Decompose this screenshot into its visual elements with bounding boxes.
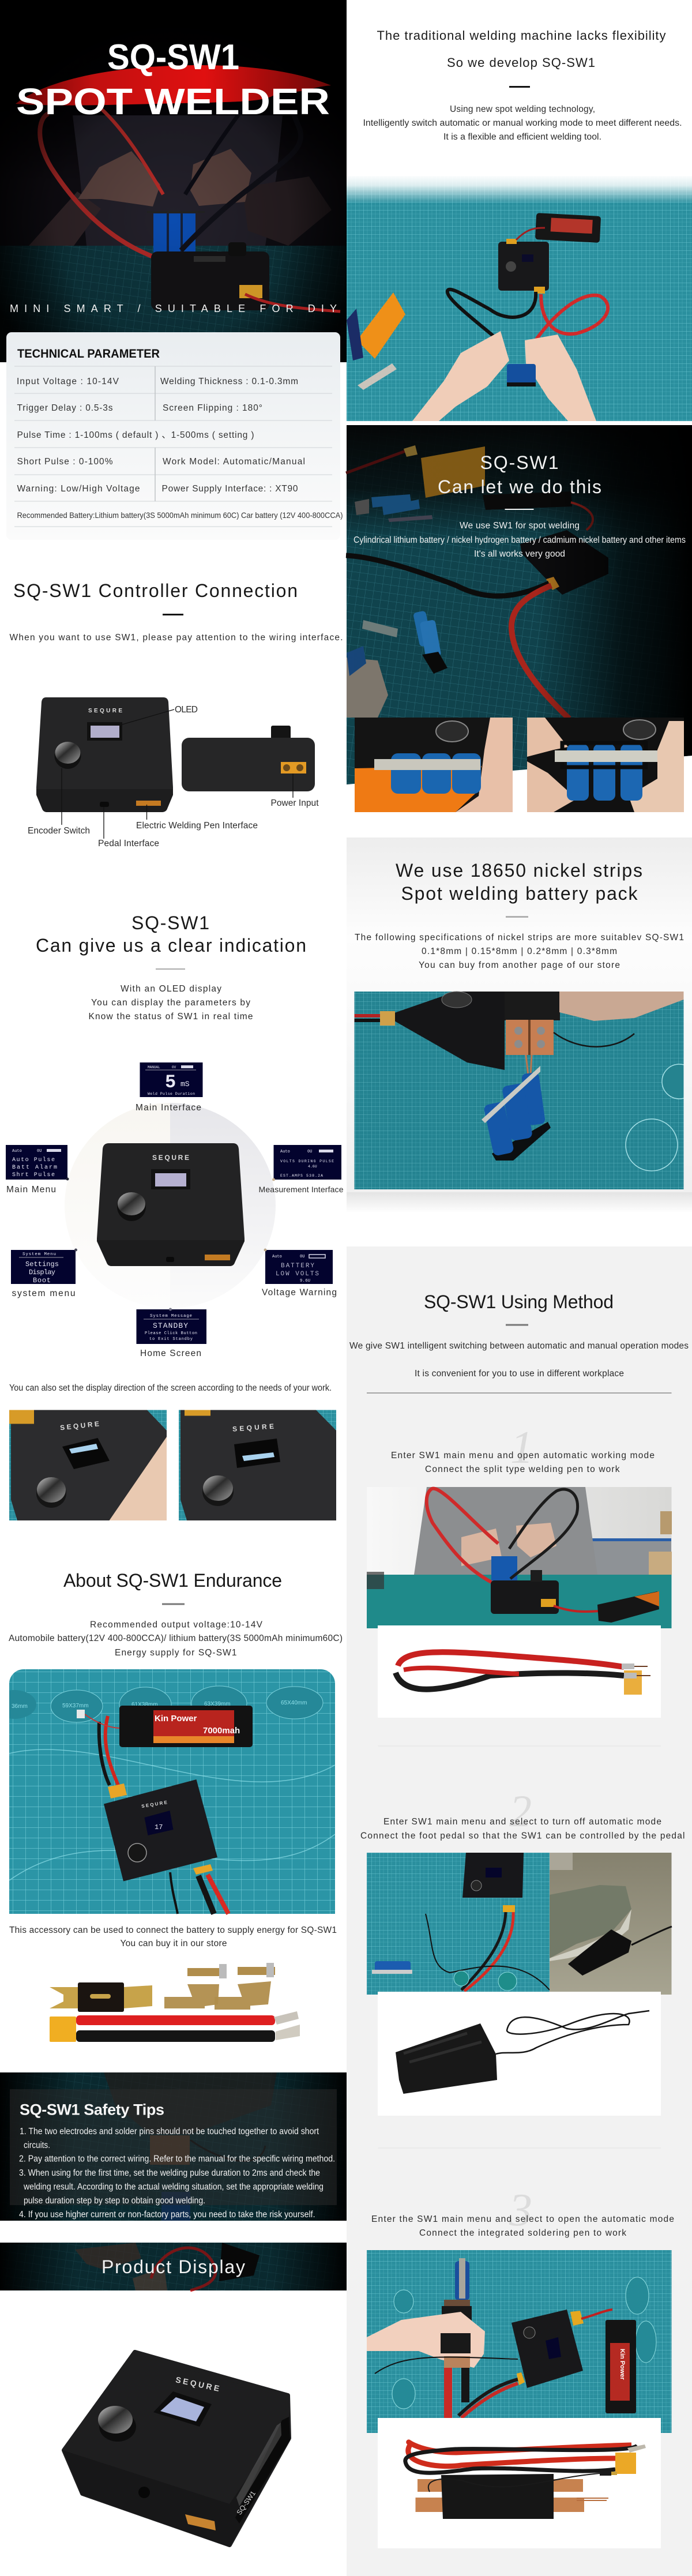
screen: measurement interface: Auto — [280, 1150, 290, 1154]
screen: home screen: to Exit Standby — [149, 1337, 193, 1342]
device silhouette — [151, 242, 340, 311]
photo: cells in black holder — [527, 718, 684, 812]
photo: battery and device: SEQURE — [141, 1800, 168, 1809]
section text: Recommended output voltage:10-14V — [90, 1620, 263, 1630]
section text: Energy supply for SQ-SW1 — [115, 1648, 236, 1658]
intro text: Using new spot welding technology, — [450, 104, 595, 114]
step text: Enter SW1 main menu and select to turn off automatic mode — [383, 1817, 661, 1827]
panel: flexibility intro — [347, 28, 692, 421]
callout labels: Electric Welding Pen Interface — [136, 821, 258, 831]
safety list: pulse duration step by step to obtain good welding. — [24, 2196, 205, 2206]
step text — [391, 1451, 655, 1474]
section text: This accessory can be used to connect the battery to supply energy for SQ-SW1 — [9, 1925, 337, 1935]
screen: main menu — [6, 1145, 69, 1180]
photo: battery and device: 59X37mm — [62, 1703, 89, 1709]
section heading: SQ-SW1 Controller Connection — [13, 580, 298, 601]
panel: hero — [0, 0, 347, 362]
section text — [9, 1620, 343, 1658]
panel: can let we do this — [346, 425, 692, 812]
callout labels: Power Input — [271, 798, 319, 808]
device: front view: SEQURE — [88, 708, 122, 714]
screen: voltage warning — [264, 1248, 333, 1284]
panel: nickel strips — [347, 838, 692, 1213]
screen: main interface: mS — [180, 1080, 190, 1088]
intro text — [363, 104, 682, 142]
section text — [9, 1925, 337, 1948]
parameter rows: Power Supply Interface: : XT90 — [161, 484, 298, 494]
photo: welding on cutting mat — [347, 175, 692, 421]
photo: battery and device: 63X39mm — [204, 1701, 231, 1707]
photo: shoe on pedal — [550, 1853, 672, 1995]
section text: You can display the parameters by — [91, 998, 250, 1008]
screen: measurement interface: 0U — [307, 1150, 312, 1154]
parameter rows — [17, 377, 343, 520]
screen: voltage warning: LOW VOLTS — [276, 1271, 319, 1278]
screen: voltage warning: 9.6U — [300, 1279, 310, 1283]
brush stroke — [16, 65, 331, 106]
section heading: SQ-SW1 Using Method — [424, 1291, 614, 1312]
parameter heading: TECHNICAL PARAMETER — [17, 347, 160, 361]
screen: main interface: 5 — [165, 1072, 176, 1093]
intro heading: The traditional welding machine lacks flexibility — [377, 28, 665, 43]
screen: main menu: Auto — [12, 1149, 22, 1154]
screen: measurement interface — [272, 1145, 341, 1181]
screen: voltage warning: Auto — [272, 1255, 282, 1259]
step text: Enter SW1 main menu and open automatic working mode — [391, 1451, 655, 1460]
section heading — [36, 913, 306, 956]
callout labels: Encoder Switch — [28, 826, 90, 836]
heading band: Product Display — [101, 2256, 245, 2277]
step 3 — [367, 2185, 674, 2548]
screen: system menu: Settings — [25, 1260, 59, 1268]
photo: pedal wiring on mat — [367, 1853, 550, 1995]
nickel text — [355, 933, 684, 970]
backdrop circle — [65, 1103, 276, 1308]
screen: main menu: Shrt Pulse — [12, 1171, 55, 1178]
parameter rows: Warning: Low/High Voltage — [17, 484, 140, 494]
photo: integrated pen on mat: Kin Power — [619, 2349, 626, 2380]
photo: spot welding pack — [354, 992, 692, 1189]
section text: You can buy it in our store — [120, 1939, 227, 1948]
parameter rows: Pulse Time : 1-100ms ( default ) 、1-500ms ( setting ) — [17, 430, 254, 440]
section heading: About SQ-SW1 Endurance — [63, 1570, 282, 1591]
screen: system menu: Boot — [33, 1276, 51, 1285]
intro heading: So we develop SQ-SW1 — [447, 55, 595, 70]
device: front view — [36, 697, 173, 812]
photo: battery and device: 36mm — [12, 1703, 28, 1710]
screen: main menu: Batt Alarm — [12, 1164, 57, 1171]
section text: With an OLED display — [121, 984, 221, 994]
dim background objects — [346, 445, 608, 719]
step text: Enter the SW1 main menu and select to open the automatic mode — [371, 2214, 674, 2224]
safety heading: SQ-SW1 Safety Tips — [20, 2101, 164, 2118]
photo: screen direction one: SEQURE — [59, 1420, 100, 1432]
nickel heading: Spot welding battery pack — [401, 883, 638, 904]
safety list: 2. Pay attention to the correct wiring. Refer to the manual for the specific wiring method. — [19, 2154, 335, 2164]
parameter rows: Input Voltage : 10-14V — [17, 377, 119, 386]
photo: workbench — [367, 1487, 672, 1628]
photo: battery accessories — [50, 1963, 300, 2042]
screen: system menu: System Menu — [22, 1252, 56, 1257]
screen: home screen: Please Click Button — [145, 1331, 197, 1336]
label: system menu — [12, 1289, 75, 1298]
section text — [89, 984, 253, 1022]
panel: endurance — [0, 1570, 343, 2042]
device: product shot — [63, 2352, 290, 2547]
screen: voltage warning: 0U — [300, 1255, 304, 1259]
section heading — [438, 452, 601, 497]
screen: system menu — [11, 1248, 77, 1285]
photo: battery and device: 17 — [155, 1823, 163, 1831]
device: product shot: SQ-SW1 — [235, 2489, 257, 2517]
device: centre: SEQURE — [152, 1154, 189, 1162]
step text — [360, 1817, 685, 1841]
step text: Connect the foot pedal so that the SW1 can be controlled by the pedal — [360, 1831, 685, 1841]
screen: main interface: 0V — [172, 1065, 176, 1069]
panel: controller connection — [9, 580, 343, 848]
device: side view — [182, 726, 315, 791]
title: SPOT WELDER — [16, 81, 330, 122]
photo: welding pen kit — [378, 2418, 661, 2548]
panel: using method — [347, 1246, 692, 2576]
photo: split welding pens — [378, 1625, 661, 1718]
photo: battery and device: Kin Power — [155, 1714, 197, 1723]
label: Main Interface — [136, 1103, 201, 1113]
screen: main interface: MANUAL — [148, 1065, 160, 1069]
section text: It is convenient for you to use in different workplace — [415, 1369, 624, 1379]
label: Main Menu — [6, 1185, 56, 1195]
screen: main interface — [140, 1062, 203, 1097]
title: SQ-SW1 — [107, 37, 239, 77]
step number: 3 — [509, 2185, 532, 2236]
section text: Automobile battery(12V 400-800CCA)/ lithium battery(3S 5000mAh minimum60C) — [9, 1634, 343, 1643]
label: Voltage Warning — [262, 1287, 337, 1298]
panel: safety tips — [0, 2072, 347, 2221]
photo: battery and device: 61X38mm — [131, 1702, 158, 1708]
section heading: SQ-SW1 — [131, 913, 209, 933]
photo: screen direction two: SEQURE — [232, 1422, 274, 1433]
label: Measurement Interface — [258, 1185, 344, 1194]
photo: battery and device — [0, 1669, 335, 1914]
step number: 2 — [509, 1786, 532, 1836]
screen: main interface: Weld Pulse Duration — [148, 1092, 195, 1096]
photo: foot pedal — [378, 1992, 661, 2116]
section heading: Can give us a clear indication — [36, 935, 306, 956]
parameter rows: Screen Flipping : 180° — [163, 403, 262, 413]
photo: integrated pen on mat — [367, 2250, 671, 2433]
step text: Connect the split type welding pen to work — [425, 1465, 620, 1474]
callout labels — [28, 705, 319, 848]
parameter rows: Short Pulse : 0-100% — [17, 457, 113, 467]
screen: measurement interface: VOLTS DURING PULSE — [280, 1159, 334, 1163]
section heading: SQ-SW1 — [480, 452, 558, 473]
screen: home screen: System Message — [150, 1314, 192, 1319]
screen: home screen: STANDBY — [153, 1321, 188, 1330]
section text: We use SW1 for spot welding — [460, 521, 580, 531]
screen: measurement interface: 4.6U — [308, 1165, 317, 1169]
step 2 — [360, 1786, 685, 2116]
tagline: MINI SMART / SUITABLE FOR DIY — [10, 303, 337, 314]
section text — [353, 521, 686, 559]
screen: main menu: 0U — [37, 1149, 42, 1154]
screen: home screen — [136, 1308, 206, 1344]
photo: battery and device: 65X40mm — [281, 1700, 307, 1706]
safety list: circuits. — [24, 2141, 50, 2150]
intro text: Intelligently switch automatic or manual working mode to meet different needs. — [363, 118, 682, 128]
step 1 — [367, 1422, 672, 1718]
step number: 1 — [510, 1422, 533, 1473]
photo: cells in orange holder — [355, 718, 513, 812]
title — [16, 37, 330, 122]
intro text: It is a flexible and efficient welding tool. — [443, 132, 601, 142]
screen: main menu: Auto Pulse — [12, 1156, 55, 1163]
screen: measurement interface: EST.AMPS 538.2A — [280, 1174, 323, 1178]
photo: screen direction one — [9, 1410, 167, 1520]
callout labels: OLED — [175, 705, 198, 715]
nickel text: You can buy from another page of our store — [419, 960, 620, 970]
section text: Know the status of SW1 in real time — [89, 1012, 253, 1022]
label: Home Screen — [140, 1349, 201, 1358]
panel: technical parameter — [6, 332, 343, 540]
safety list: 1. The two electrodes and solder pins should not be touched together to avoid short — [20, 2127, 319, 2136]
device: product shot: SEQURE — [175, 2375, 220, 2393]
nickel heading — [396, 860, 642, 904]
step text — [371, 2214, 674, 2238]
safety list: 3. When using for the first time, set the welding pulse duration to 2ms and check the — [19, 2168, 320, 2178]
screen: voltage warning: BATTERY — [281, 1263, 314, 1270]
photo: battery and device: 7000mah — [203, 1726, 240, 1736]
parameter rows: Work Model: Automatic/Manual — [163, 457, 305, 467]
screen: system menu: Display — [29, 1268, 55, 1276]
device: centre — [97, 1143, 245, 1266]
section text: When you want to use SW1, please pay attention to the wiring interface. — [9, 633, 343, 643]
nickel heading: We use 18650 nickel strips — [396, 860, 642, 881]
panel: clear indication — [6, 913, 344, 1520]
section text — [349, 1341, 689, 1379]
safety list: welding result. According to the actual welding situation, set the appropriate welding — [23, 2182, 324, 2192]
nickel text: The following specifications of nickel strips are more suitablev SQ-SW1 — [355, 933, 684, 942]
section text: We give SW1 intelligent switching between automatic and manual operation modes — [349, 1341, 689, 1351]
nickel text: 0.1*8mm | 0.15*8mm | 0.2*8mm | 0.3*8mm — [422, 947, 617, 956]
parameter rows: Recommended Battery:Lithium battery(3S 5000mAh minimum 60C) Car battery (12V 400-800CCA) — [17, 510, 343, 520]
callout lines — [62, 709, 293, 839]
intro heading — [377, 28, 665, 70]
parameter rows: Trigger Delay : 0.5-3s — [17, 403, 113, 413]
section text: It's all works very good — [474, 549, 565, 559]
section heading: Can let we do this — [438, 476, 601, 497]
text: display direction: You can also set the display direction of the screen according to the needs of your work. — [9, 1383, 332, 1393]
photo: screen direction two — [179, 1410, 336, 1520]
panel: product display — [0, 2243, 347, 2547]
step text: Connect the integrated soldering pen to work — [419, 2228, 626, 2238]
callout labels: Pedal Interface — [98, 839, 159, 848]
heading band — [0, 2243, 347, 2290]
safety list — [19, 2127, 335, 2220]
safety list: 4. If you use higher current or non-factory parts, you need to take the risk yourself. — [19, 2210, 315, 2220]
parameter rows: Welding Thickness : 0.1-0.3mm — [160, 377, 298, 386]
